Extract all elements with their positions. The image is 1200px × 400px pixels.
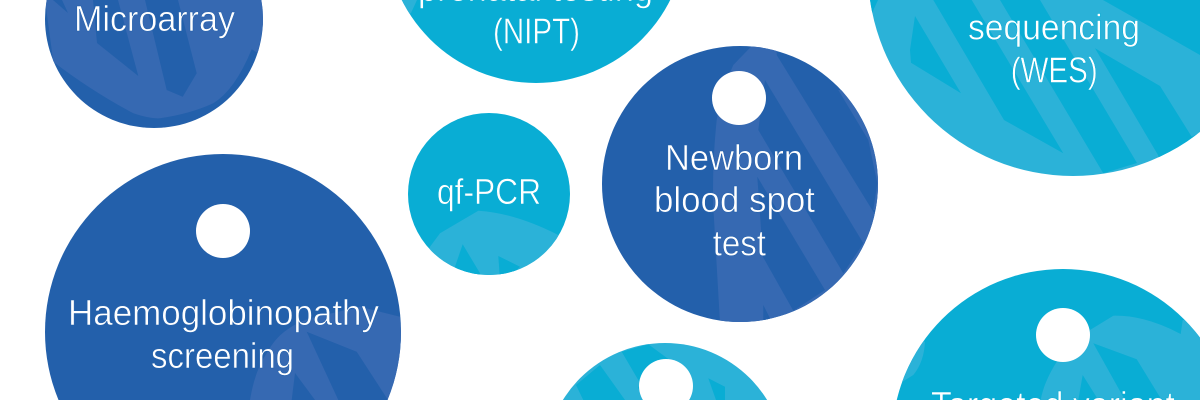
- DNA watermark: [45, 0, 267, 118]
- panel: bottom centre circle: [562, 343, 768, 400]
- panel: Whole exome sequencing: [865, 0, 1200, 180]
- DNA watermark: [430, 210, 558, 275]
- panel: Newborn blood spot test: [602, 46, 880, 323]
- label: sequencing: [968, 6, 1140, 48]
- label: blood spot: [654, 179, 815, 220]
- label: [418, 0, 653, 52]
- marker dot: [712, 71, 766, 125]
- label: [968, 6, 1140, 91]
- panel: qf-PCR: [408, 113, 570, 280]
- DNA watermark: [402, 0, 417, 14]
- DNA watermark gaps: [865, 0, 1200, 180]
- marker dot: [639, 359, 693, 400]
- label: (WES): [1011, 50, 1098, 91]
- DNA watermark: [250, 307, 405, 400]
- label: qf-PCR: [437, 171, 541, 212]
- label: [654, 137, 815, 264]
- marker dot: [1036, 308, 1090, 362]
- label: test: [713, 223, 766, 264]
- DNA watermark gaps: [576, 344, 725, 400]
- panel: Haemoglobinopathy screening: [45, 154, 405, 400]
- panel: Targeted variant: [888, 269, 1200, 400]
- label: [68, 292, 379, 376]
- panel: Microarray: [45, 0, 267, 128]
- DNA watermark: [888, 316, 1200, 400]
- panel: NIPT: [402, 0, 670, 83]
- marker dot: [196, 204, 250, 258]
- DNA watermark: [713, 46, 880, 323]
- label: screening: [151, 335, 294, 376]
- label: Newborn: [665, 137, 803, 178]
- label: Haemoglobinopathy: [68, 292, 379, 333]
- label: (NIPT): [493, 10, 580, 52]
